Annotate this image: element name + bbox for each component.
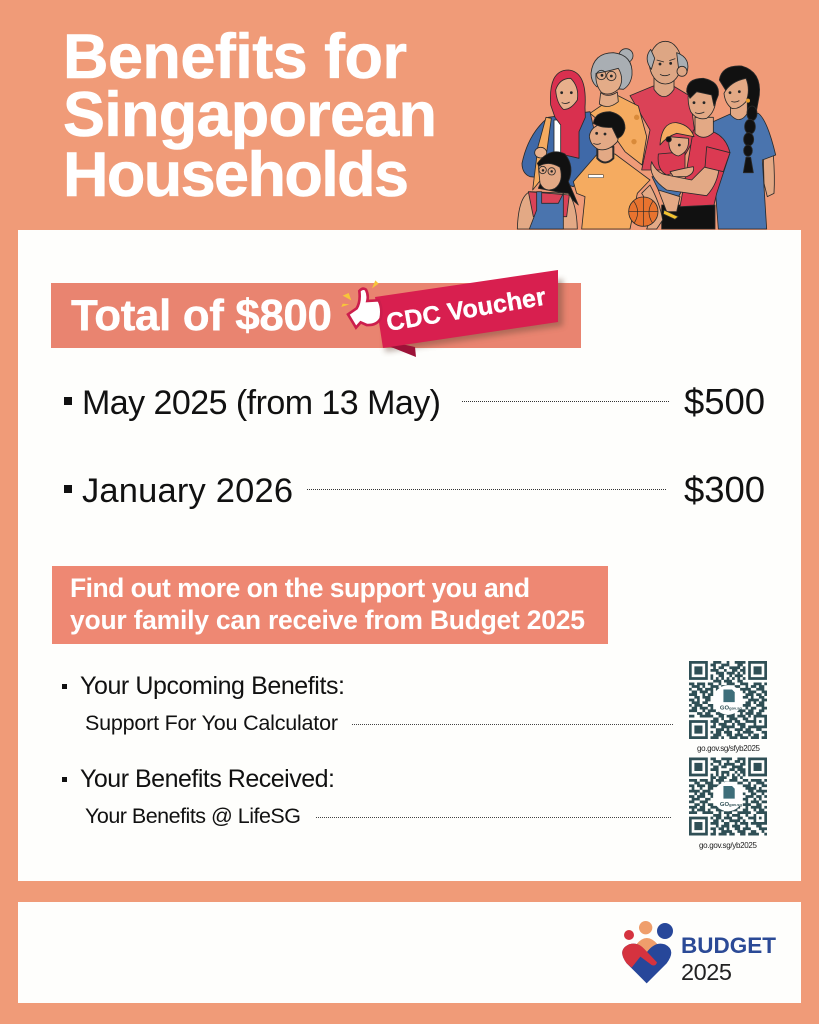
title: Households <box>63 140 409 210</box>
banner: find out more <box>52 566 608 644</box>
panel: footer <box>18 902 801 1003</box>
list: benefits received: Your Benefits Received: <box>80 765 335 793</box>
list: upcoming benefits: Your Upcoming Benefits: <box>80 672 345 700</box>
figure: woman in blue dress <box>712 66 776 229</box>
title <box>63 22 437 210</box>
title: Singaporean <box>63 80 437 150</box>
figure: baby <box>652 123 694 219</box>
icon: thumbs up <box>341 280 381 328</box>
list: voucher schedule <box>64 381 765 510</box>
figure: girl in overalls <box>517 152 578 229</box>
logo: Budget 2025: 2025 <box>681 959 732 985</box>
row: January 2026: January 2026 <box>82 472 293 510</box>
banner: total amount <box>51 270 581 357</box>
banner: total amount: Total of $800 <box>71 291 332 340</box>
banner: find out more: your family can receive from Budget 2025 <box>70 605 585 635</box>
QR code: support for you calculator <box>689 661 767 753</box>
logo: Budget 2025: BUDGET <box>681 933 776 958</box>
row: May 2025 <box>64 381 765 422</box>
ribbon: CDC Voucher <box>375 270 563 357</box>
ribbon: CDC Voucher: CDC Voucher <box>384 283 548 337</box>
list: benefits received <box>62 765 672 828</box>
QR code: your benefits at LifeSG <box>689 758 767 850</box>
QR code: support for you calculator: go.gov.sg/sfyb2025 <box>697 744 761 753</box>
icon: heart with figures <box>622 921 673 983</box>
figure: boy with basketball <box>573 112 663 229</box>
braid <box>743 106 757 173</box>
row: May 2025: $500 <box>684 381 765 422</box>
row: January 2026 <box>64 469 765 510</box>
row: January 2026: $300 <box>684 469 765 510</box>
QR code: your benefits at LifeSG: GOgov.sg <box>720 802 742 808</box>
list: benefits received: Your Benefits @ LifeSG <box>85 804 301 828</box>
list: upcoming benefits: Support For You Calculator <box>85 711 338 735</box>
figure: father holding baby <box>651 78 730 229</box>
banner: find out more: Find out more on the support you and <box>70 573 530 603</box>
figure: grandfather <box>630 41 695 170</box>
row: May 2025: May 2025 (from 13 May) <box>82 384 441 422</box>
QR code: your benefits at LifeSG: go.gov.sg/yb2025 <box>699 841 758 850</box>
logo: Budget 2025 <box>622 921 776 985</box>
list: upcoming benefits <box>62 672 674 735</box>
figure: grandmother <box>590 49 647 165</box>
title: Benefits for <box>63 22 407 92</box>
illustration: multi-generation family <box>517 41 776 229</box>
figure: woman in hijab <box>522 70 599 190</box>
panel: main content <box>18 230 801 881</box>
QR code: support for you calculator: GOgov.sg <box>720 705 742 711</box>
